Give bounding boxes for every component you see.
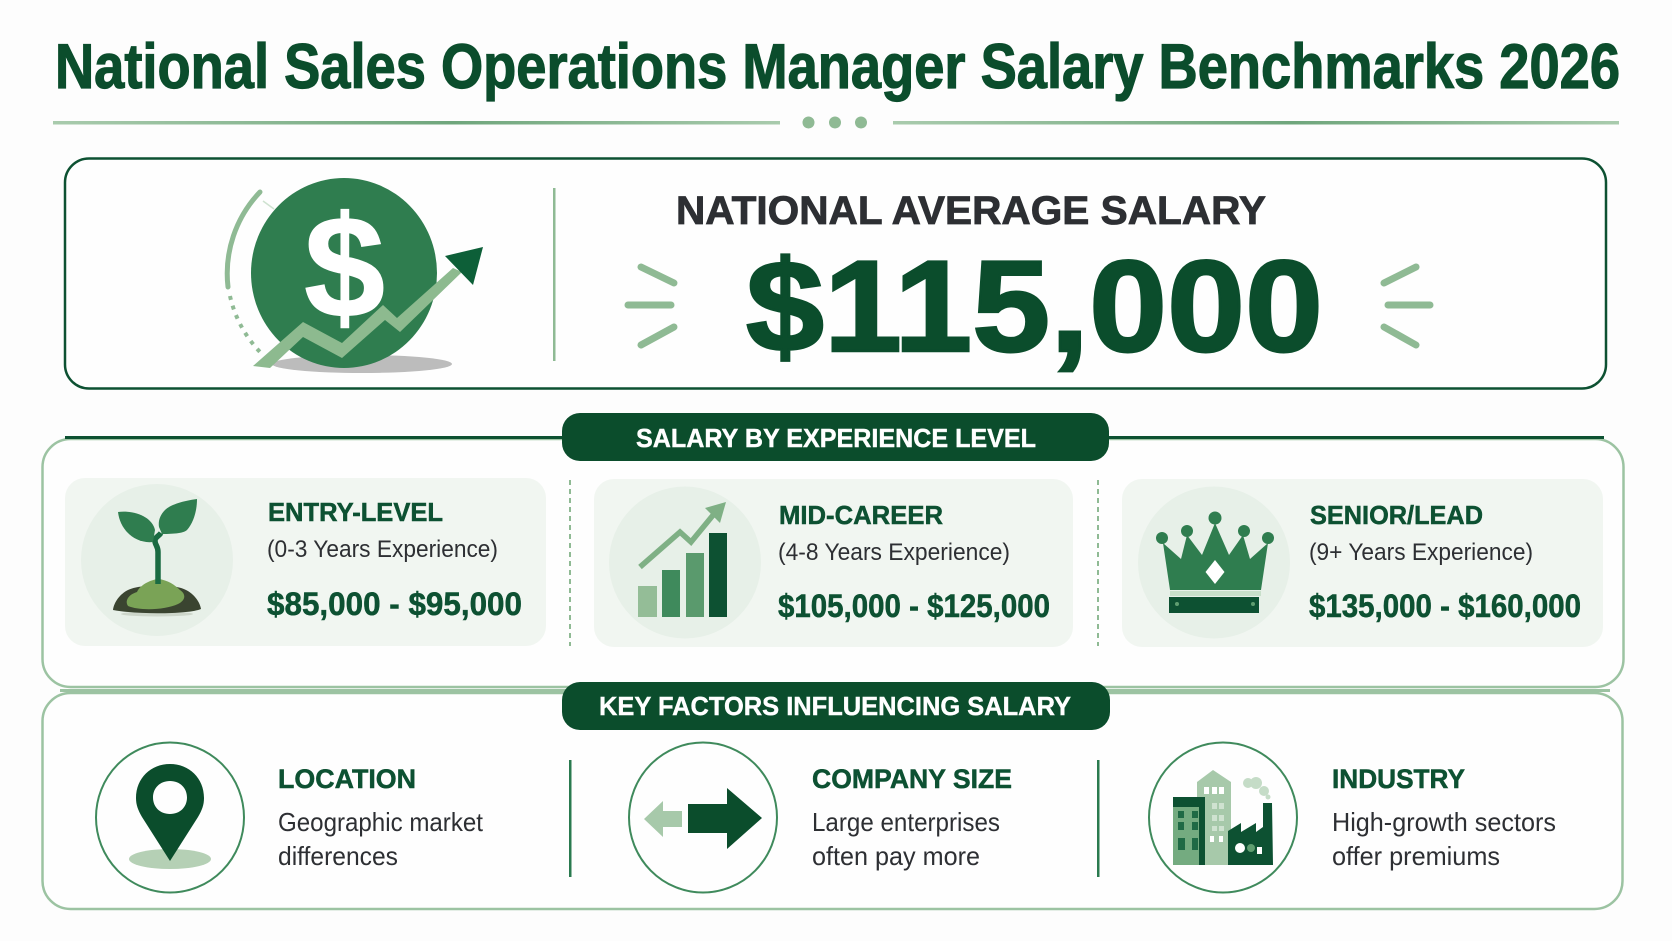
icon: left emphasis rays: [628, 267, 674, 345]
card: senior/lead: SENIOR/LEAD: [1310, 500, 1483, 530]
card: entry-level: (0-3 Years Experience): [267, 536, 498, 563]
icon: sprout: [81, 484, 233, 636]
factor: company size: COMPANY SIZE: [812, 764, 1012, 794]
factor: company size: Large enterprises: [812, 807, 1000, 837]
card: entry-level: [65, 478, 546, 646]
icon: dollar coin with rising arrow: [227, 178, 483, 373]
icon: right emphasis rays: [1384, 267, 1430, 345]
icon: buildings and factory: [1149, 742, 1297, 892]
divider: [553, 188, 556, 361]
heading pill: salary by experience level: [562, 413, 1109, 461]
icon: dollar coin with rising arrow: $: [304, 186, 385, 348]
factor: location: Geographic market: [278, 807, 484, 837]
heading pill: salary by experience level: SALARY BY EXPERIENCE LEVEL: [636, 423, 1036, 453]
factor: industry: [1149, 742, 1556, 892]
title divider with dots: [53, 116, 1619, 128]
card: senior/lead: (9+ Years Experience): [1309, 539, 1533, 566]
icon: size arrows: [629, 742, 777, 892]
factor: industry: High-growth sectors: [1332, 807, 1556, 837]
card: senior/lead: [1122, 479, 1603, 647]
icon: map pin: [96, 742, 244, 892]
card: mid-career: $105,000 - $125,000: [778, 588, 1050, 624]
card: entry-level: $85,000 - $95,000: [267, 586, 522, 622]
card: senior/lead: $135,000 - $160,000: [1309, 588, 1581, 624]
heading pill: key factors influencing salary: [562, 682, 1110, 730]
panel: key factors influencing salary: [42, 682, 1622, 909]
card: mid-career: MID-CAREER: [779, 500, 943, 530]
factor: location: [96, 742, 484, 892]
icon: crown: [1138, 486, 1290, 638]
factor: industry: INDUSTRY: [1332, 764, 1465, 794]
card: mid-career: [594, 479, 1073, 647]
factor: location: LOCATION: [278, 764, 416, 794]
factor: company size: [629, 742, 1012, 892]
heading pill: key factors influencing salary: KEY FACTORS INFLUENCING SALARY: [599, 691, 1071, 721]
panel: salary by experience level: [42, 413, 1624, 687]
factor: company size: often pay more: [812, 841, 980, 871]
heading: national average salary: NATIONAL AVERAGE SALARY: [676, 189, 1266, 233]
icon: growth bar chart: [609, 486, 761, 638]
card: entry-level: ENTRY-LEVEL: [268, 497, 443, 527]
panel: national average salary: [65, 158, 1606, 388]
factor: location: differences: [278, 841, 398, 871]
value: national average salary: $115,000: [746, 233, 1323, 379]
card: mid-career: (4-8 Years Experience): [778, 539, 1010, 566]
factor: industry: offer premiums: [1332, 841, 1500, 871]
